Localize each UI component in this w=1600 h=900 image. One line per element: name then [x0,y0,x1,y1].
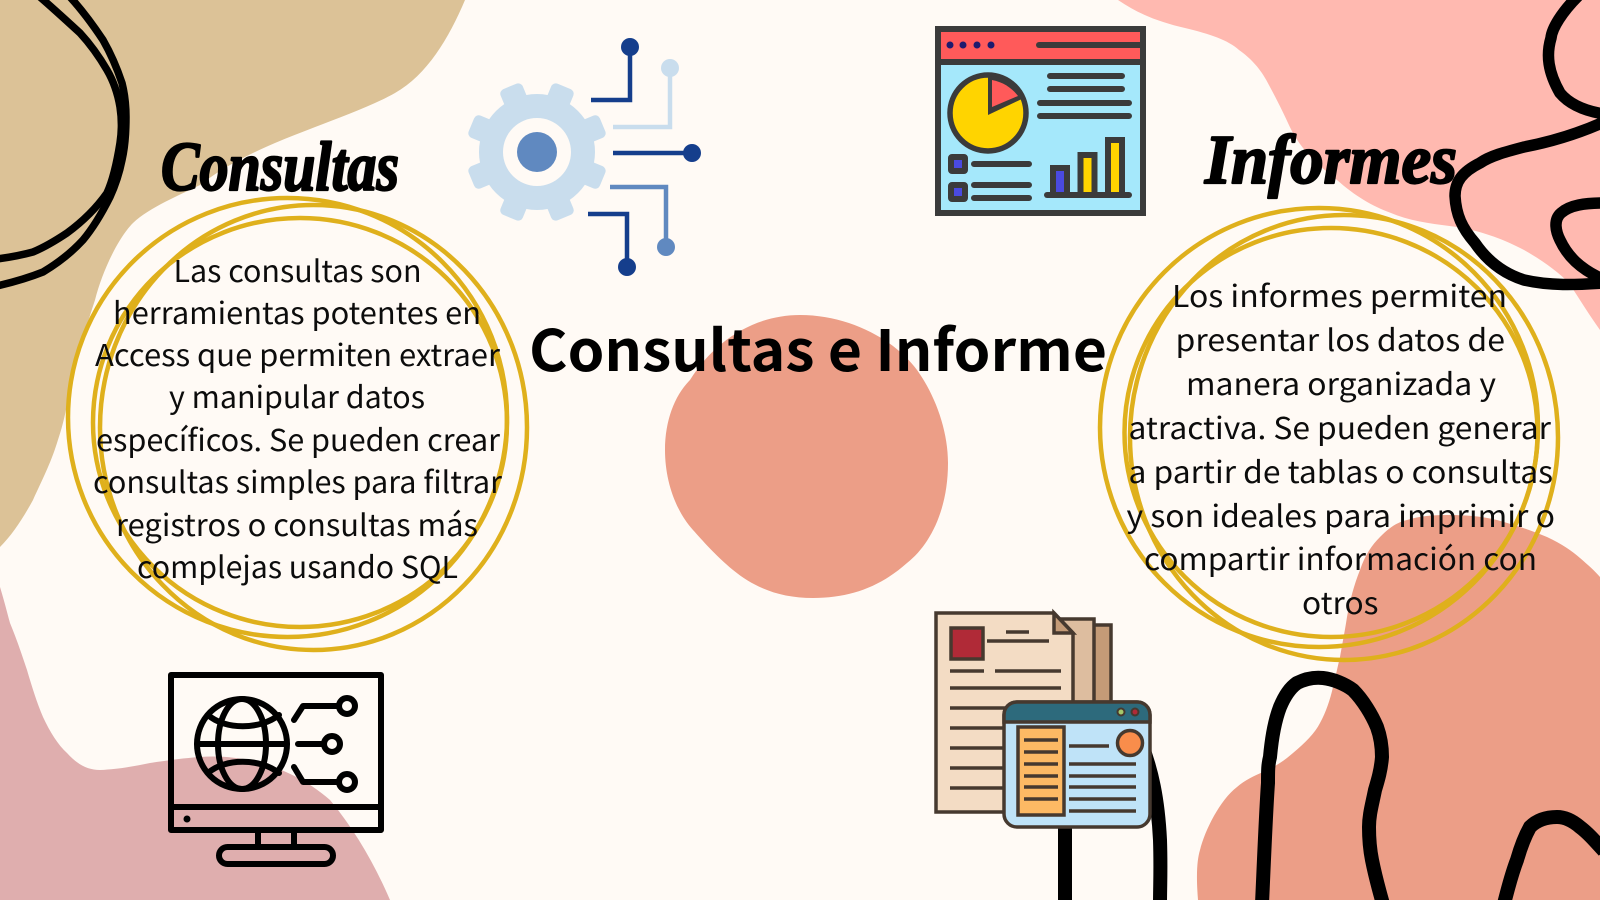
text block: consultas description: complejas usando SQL [137,543,458,587]
text block: informes description: otros [1302,579,1378,623]
title: Consultas e Informe [529,306,1107,388]
icon: dashboard window [938,29,1143,213]
gear [467,82,607,222]
text block: consultas description: herramientas potentes en [113,289,481,333]
text block: consultas description: específicos. Se pueden crear [96,416,500,460]
background blob: mauve bottom-left [0,587,390,900]
icon: documents with browser window [936,613,1150,827]
text block: consultas description: registros o consultas más [116,501,478,545]
circuit traces [588,38,701,276]
background blob: tan top-left [0,0,465,547]
text block: informes description: a partir de tablas o consultas [1128,448,1553,492]
text block: consultas description [93,247,502,587]
squiggle: top-right black loops [1455,0,1600,285]
background blob: salmon bottom-right [1197,515,1600,900]
text block: informes description: atractiva. Se pueden generar [1128,404,1551,448]
gold circles: right [1100,208,1558,660]
background blob: pink top-right [1118,0,1600,330]
text block: informes description [1126,272,1555,623]
text block: consultas description: Access que permiten extraer [95,331,500,375]
squiggle: top-left black loops [0,0,126,286]
text block: informes description: manera organizada y [1186,360,1496,404]
gold circles: left [68,198,527,650]
icon: gear with circuit [467,38,701,276]
heading: Informes: Informes [1204,122,1457,199]
text block: informes description: compartir información con [1144,535,1537,579]
text block: informes description: y son ideales para imprimir o [1126,492,1555,536]
text block: informes description: presentar los datos de [1176,316,1505,360]
text block: informes description: Los informes permiten [1172,272,1507,316]
heading: Consultas: Consultas [161,129,399,206]
center circle [665,315,948,598]
text block: consultas description: Las consultas son [174,247,422,291]
icon: monitor with globe [171,675,381,864]
text block: consultas description: y manipular datos [169,373,425,417]
text block: consultas description: consultas simples para filtrar [93,458,502,502]
squiggle: bottom-right black loops [1262,678,1600,900]
squiggle: bottom-centre black arch [1065,740,1160,900]
